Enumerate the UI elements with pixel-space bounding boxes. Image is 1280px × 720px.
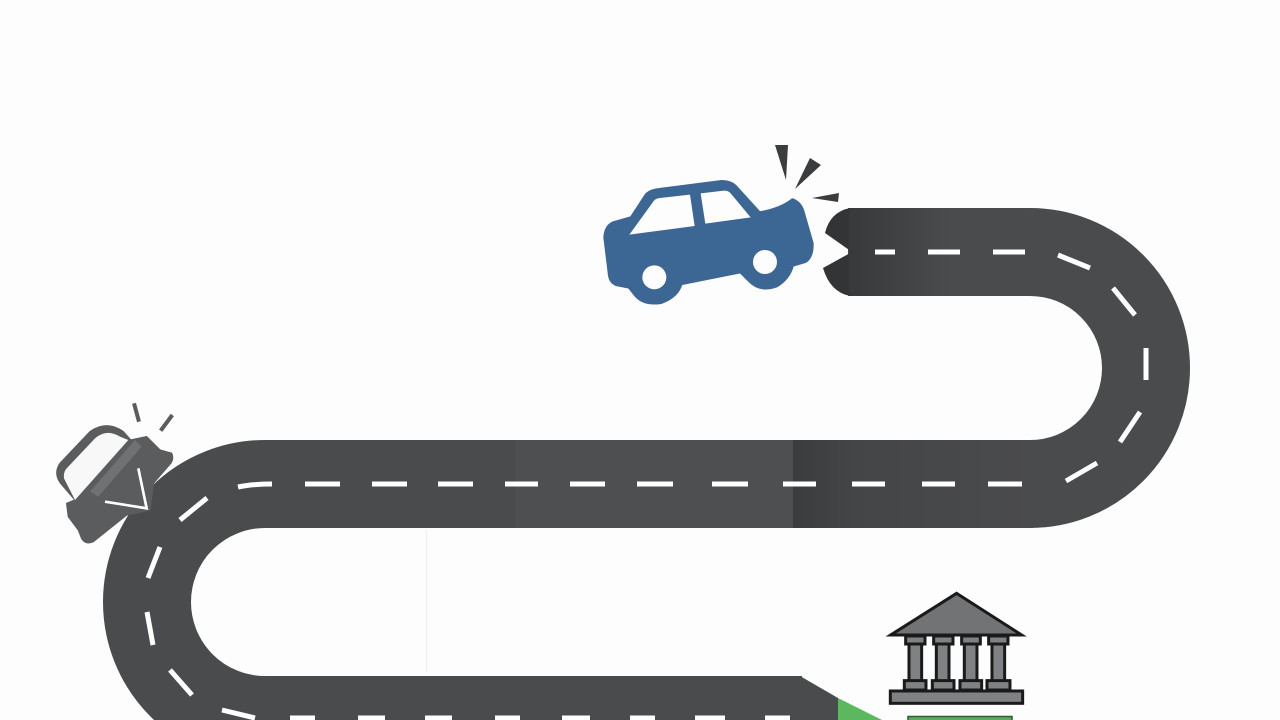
icon: bank building — [890, 593, 1023, 703]
road centre dashes — [147, 252, 1146, 718]
icon: blue crashed car — [605, 182, 812, 303]
icon: grey tipped car — [57, 403, 173, 543]
money stack — [908, 716, 1012, 720]
green road edge — [838, 698, 882, 720]
icon: impact sparks — [775, 145, 839, 202]
road — [147, 208, 1146, 720]
